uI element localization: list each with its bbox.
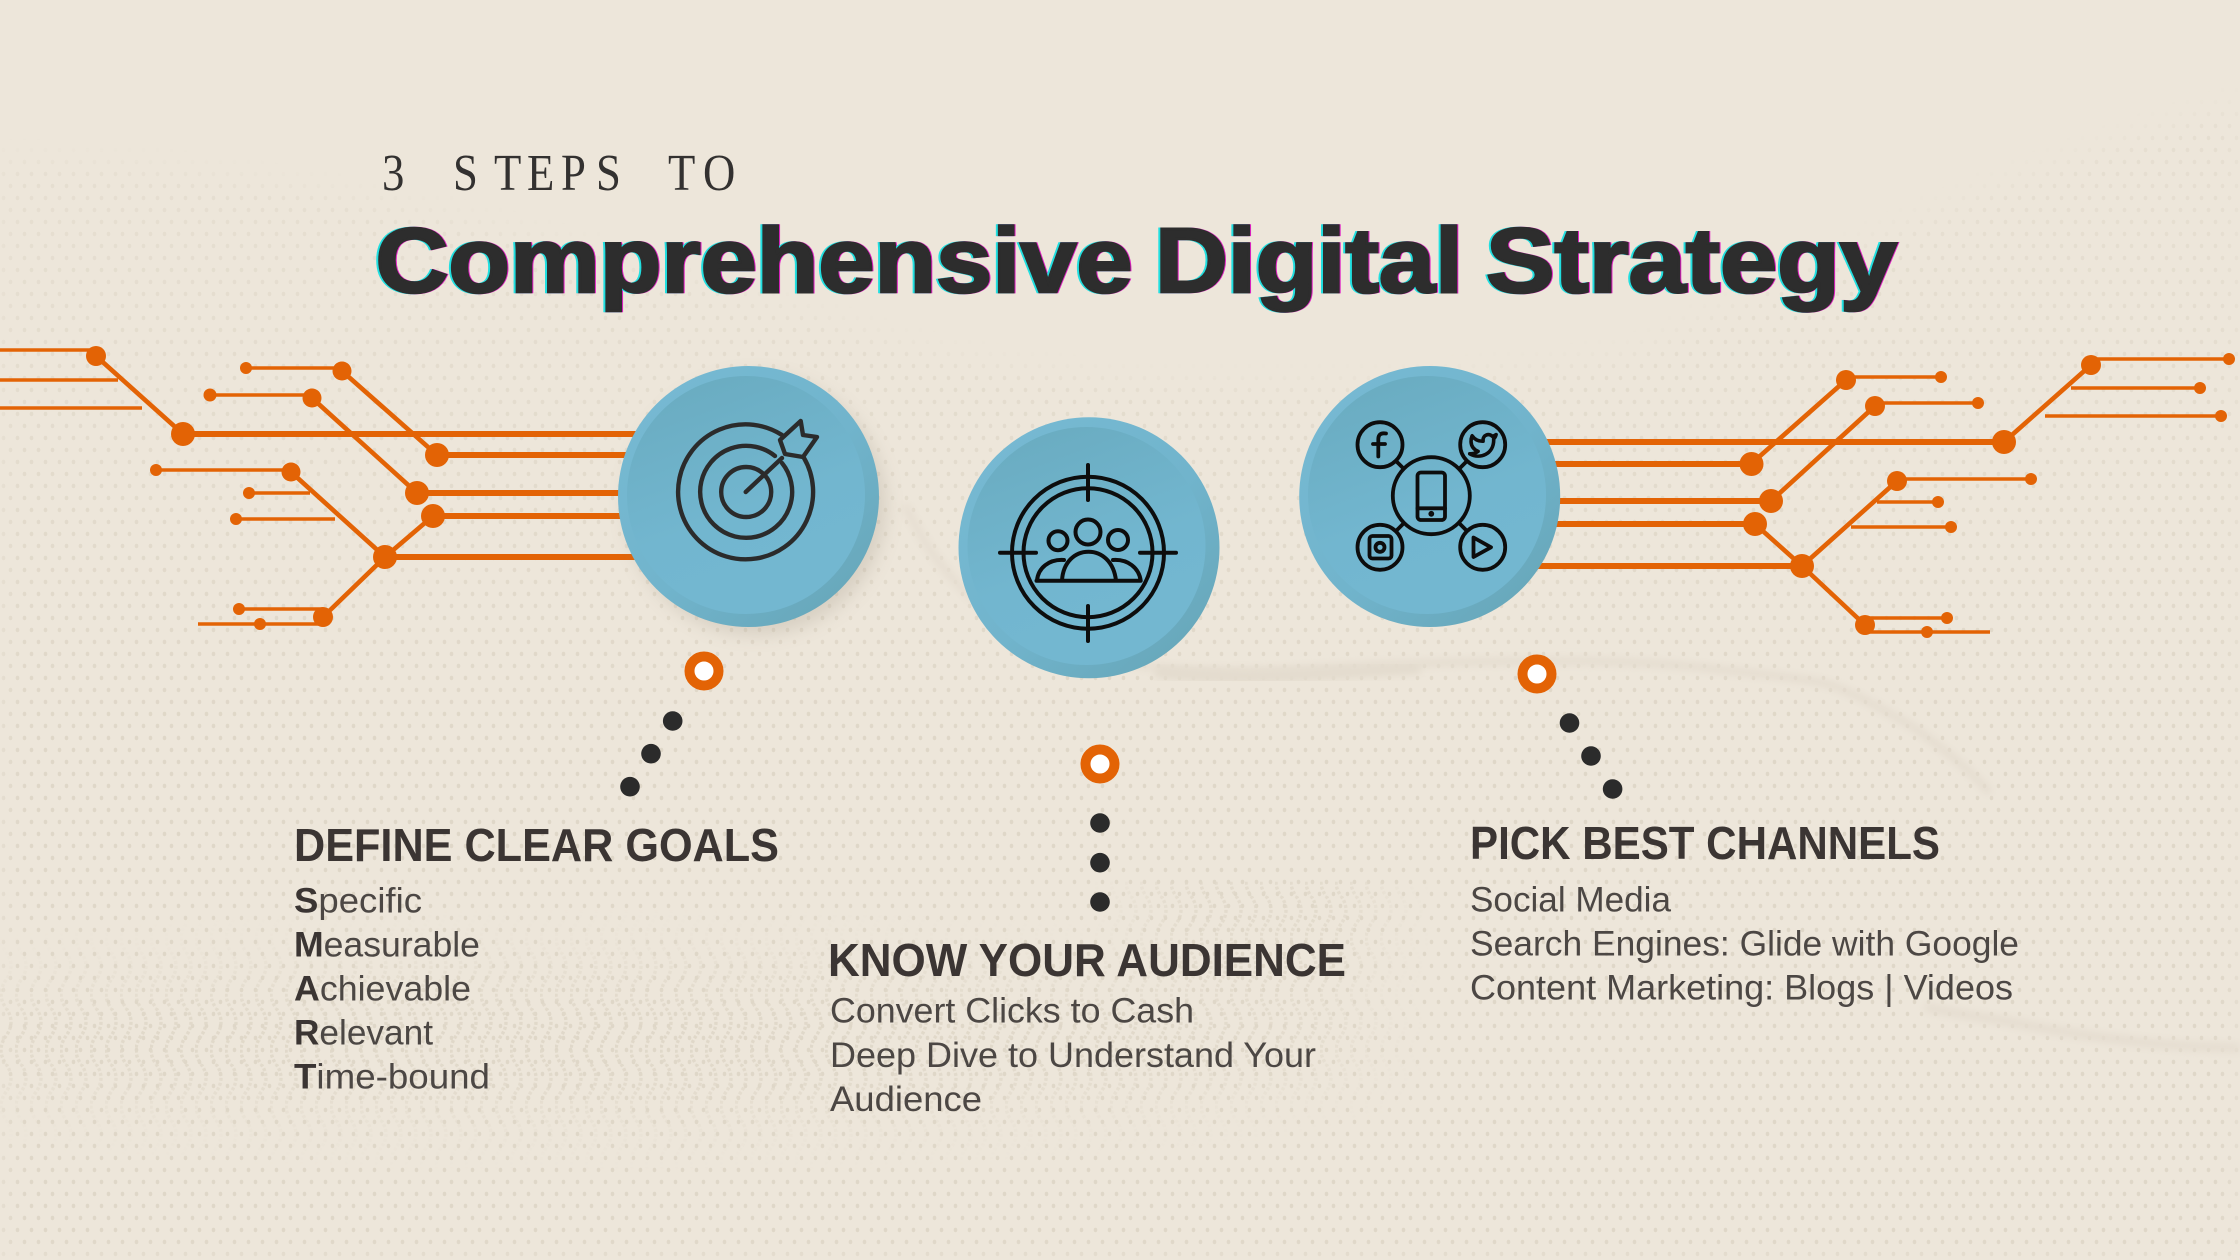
description: Audience <box>830 1080 982 1119</box>
title: Strategy <box>1486 210 1897 312</box>
circle: define goals <box>618 366 886 635</box>
text block: define clear goals <box>294 819 779 1096</box>
circle: pick channels <box>1299 366 1560 627</box>
left circuit lines <box>0 346 640 630</box>
description <box>830 992 1316 1119</box>
smart list: Achievable <box>294 970 471 1009</box>
description: Social Media <box>1470 880 1672 920</box>
right circuit lines <box>1535 353 2235 638</box>
description <box>1470 880 2019 1008</box>
connector: define goals <box>620 656 718 796</box>
smart list: Relevant <box>294 1013 433 1052</box>
smart list: Specific <box>294 882 422 921</box>
description: Convert Clicks to Cash <box>830 992 1194 1031</box>
connector: pick channels <box>1522 660 1622 799</box>
description: Search Engines: Glide with Google <box>1470 924 2019 964</box>
heading: KNOW YOUR AUDIENCE <box>828 934 1346 986</box>
description: Deep Dive to Understand Your <box>830 1036 1316 1075</box>
icon: audience in crosshair <box>1000 465 1176 641</box>
text block: pick best channels <box>1470 817 2019 1008</box>
smart list <box>294 882 490 1096</box>
text block: know your audience <box>828 934 1346 1119</box>
connector: know your audience <box>1086 750 1114 912</box>
heading: PICK BEST CHANNELS <box>1470 817 1940 869</box>
description: Content Marketing: Blogs | Videos <box>1470 968 2013 1008</box>
subtitle: 3 STEPS TO <box>382 145 735 202</box>
icon: target with arrow <box>678 421 817 559</box>
title <box>376 210 1897 312</box>
smart list: Time-bound <box>294 1057 490 1096</box>
smart list: Measurable <box>294 926 480 965</box>
heading: DEFINE CLEAR GOALS <box>294 819 779 871</box>
icon: phone with social media <box>1358 422 1505 570</box>
title: Digital <box>1155 210 1463 312</box>
title: Comprehensive <box>376 210 1132 312</box>
circle: know your audience <box>958 417 1220 678</box>
